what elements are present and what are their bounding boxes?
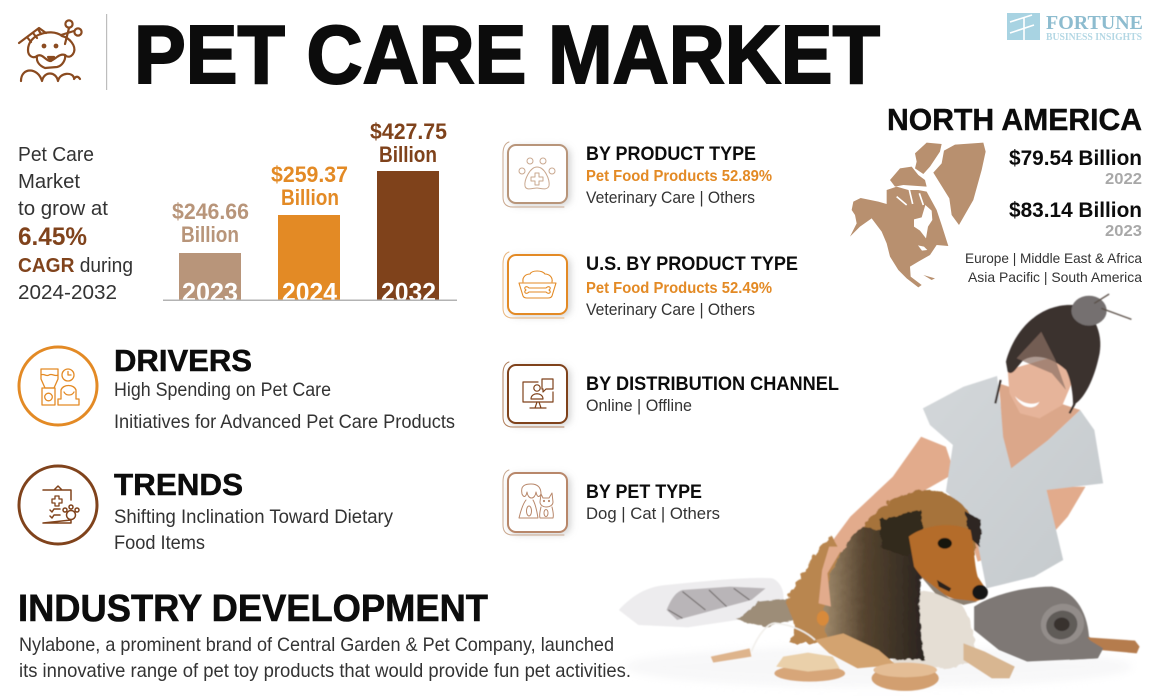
divider [106,14,107,90]
text: US by product type: Pet Food Products 52.49% [586,280,772,297]
text: trend items: Shifting Inclination Toward Dietary [114,507,393,528]
text block: market growth [18,143,133,304]
bar 2023 [172,199,249,307]
text: other regions: Asia Pacific | South America [968,269,1142,285]
text: other regions [965,250,1142,285]
text block: market growth: to grow at [18,197,108,220]
text: by product type: Pet Food Products 52.89% [586,168,772,185]
text: driver items: Initiatives for Advanced Pet Care Products [114,412,455,433]
text: US by product type: Veterinary Care | Others [586,301,755,319]
panel: by distribution channel [503,362,839,427]
icon: dog grooming logo [19,20,82,81]
text block: market growth: 2024-2032 [18,281,117,304]
text: other regions: Europe | Middle East & Africa [965,250,1142,266]
icon: food bowl [503,252,570,318]
logo: Fortune Business Insights: BUSINESS INSIGHTS [1046,32,1142,43]
text: US by product type [586,253,798,319]
icon: dog and cat [503,470,570,535]
woman [817,294,1131,607]
text: trend items [114,507,393,554]
dog [737,490,1015,678]
bar 2024 [271,162,348,307]
panel: by pet type [503,470,720,535]
panel: by product type [503,142,772,207]
text: by distribution channel: BY DISTRIBUTION CHANNEL [586,373,839,395]
text: driver items: High Spending on Pet Care [114,380,331,401]
stat: 2023 value [1009,199,1142,240]
text: by distribution channel [586,373,839,415]
text block: market growth: CAGR during [18,254,133,277]
grooming accessories [711,623,939,691]
stat: 2023 value: $83.14 Billion [1009,199,1142,222]
bar 2032: 2032 [381,277,436,307]
text: by distribution channel: Online | Offline [586,397,692,415]
text: by product type: BY PRODUCT TYPE [586,143,756,165]
bar 2024: Billion [281,185,339,210]
icon: paw with cross [503,142,570,207]
title: PET CARE MARKET [134,8,880,101]
stat: 2022 value [1009,147,1142,188]
bar 2032: $427.75 [370,119,447,144]
heading: drivers: DRIVERS [114,343,252,378]
text: by pet type [586,481,720,523]
text: by pet type: BY PET TYPE [586,481,702,503]
heading: industry development: INDUSTRY DEVELOPMENT [18,588,488,630]
panel: industry development [18,588,631,682]
text: development description: its innovative range of pet toy products that would provide fun pet activities. [19,660,631,682]
stat: 2022 value: 2022 [1105,171,1142,188]
white towel [619,578,784,627]
text: development description: Nylabone, a prominent brand of Central Garden & Pet Company, launched [19,634,614,656]
logo: Fortune Business Insights: FORTUNE [1046,12,1143,34]
panel: US by product type [503,252,798,319]
bar 2024: 2024 [282,277,338,307]
text block: market growth: Pet Care [18,143,94,166]
heading: north america: NORTH AMERICA [887,102,1142,137]
text: development description [19,634,631,682]
bar 2023: Billion [181,222,239,247]
text block: market growth: 6.45% [18,223,87,251]
bar 2024: $259.37 [271,162,348,187]
text: by pet type: Dog | Cat | Others [586,505,720,523]
map: north america [850,143,986,287]
panel: trends [19,466,393,554]
text: by product type: Veterinary Care | Others [586,189,755,207]
icon: pet feeder [19,347,97,425]
logo: Fortune Business Insights [1007,12,1143,43]
bar 2023: 2023 [182,277,238,307]
photo: woman grooming a collie dog [619,294,1140,691]
bar 2023: $246.66 [172,199,249,224]
text: by product type [586,143,772,207]
text: US by product type: U.S. BY PRODUCT TYPE [586,253,798,275]
bar 2032 [370,119,447,307]
grey towel [974,587,1140,662]
stat: 2023 value: 2023 [1105,223,1142,240]
panel: north america [850,102,1142,287]
bar 2032: Billion [379,142,437,167]
text block: market growth: Market [18,170,80,193]
bar chart: market size [163,119,457,307]
stat: 2022 value: $79.54 Billion [1009,147,1142,170]
panel: drivers [19,343,455,433]
text: trend items: Food Items [114,533,205,554]
dog fur body [737,490,981,668]
heading: trends: TRENDS [114,467,243,502]
icon: monitor with person [503,362,570,427]
text: driver items [114,380,455,433]
icon: clipboard with paw [19,466,97,544]
